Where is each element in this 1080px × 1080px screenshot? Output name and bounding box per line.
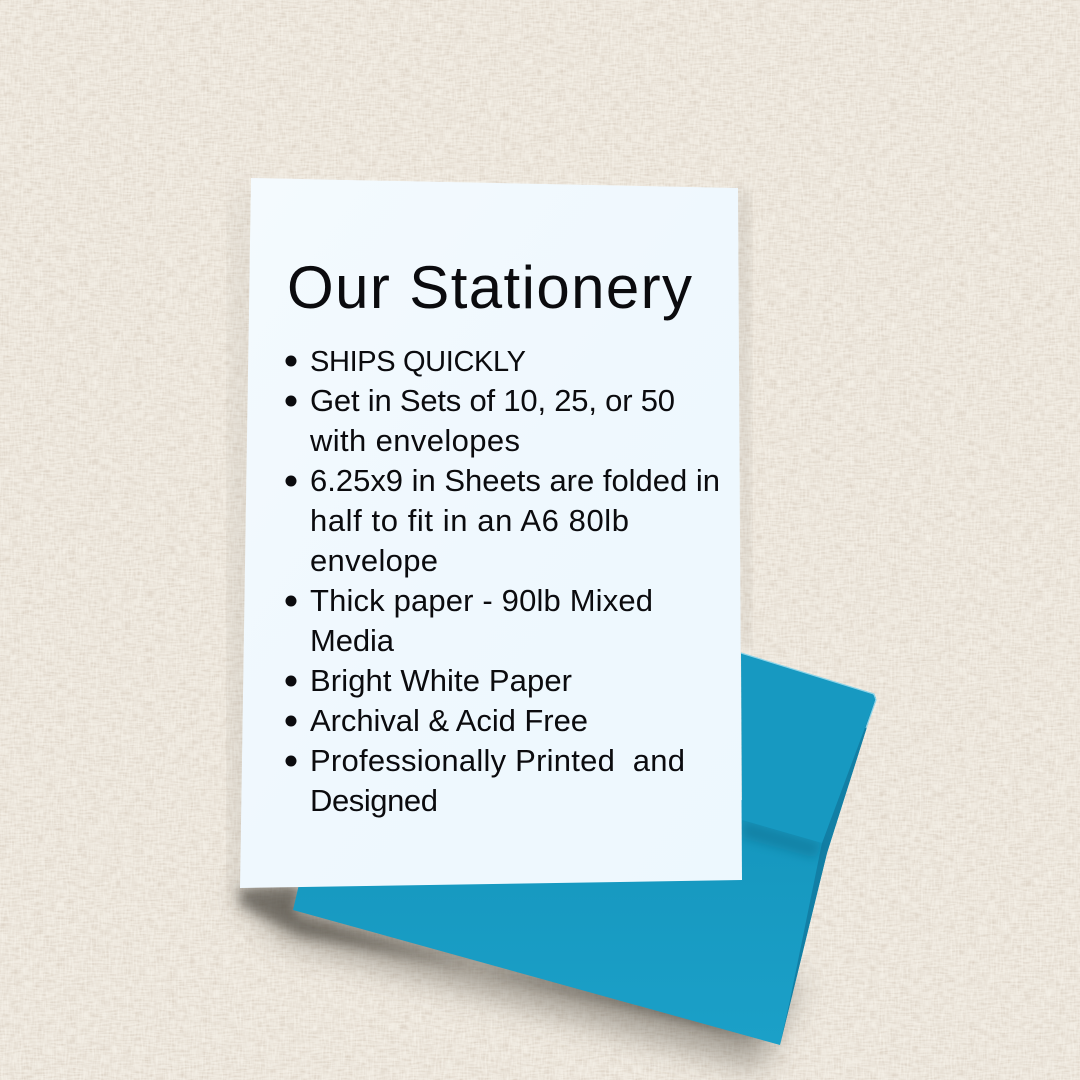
item: sets: with envelopes (309, 423, 520, 458)
title: Our Stationery (287, 254, 692, 321)
item: thick paper: Thick paper - 90lb Mixed (310, 583, 653, 618)
item: ships quickly: SHIPS QUICKLY (310, 346, 526, 378)
feature list (286, 346, 720, 818)
envelope (293, 653, 876, 1045)
item: sheet size: 6.25x9 in Sheets are folded in (310, 463, 720, 498)
item: thick paper: Media (310, 623, 395, 658)
item: sheet size (286, 463, 720, 578)
envelope body (293, 697, 876, 1045)
white stationery card (240, 178, 742, 888)
envelope flap (741, 653, 876, 843)
item: professionally printed (286, 743, 685, 818)
item: sets: Get in Sets of 10, 25, or 50 (310, 383, 675, 418)
envelope right fold (780, 697, 876, 1045)
item: thick paper (286, 583, 653, 658)
shadows beneath card and envelope (232, 180, 800, 1068)
item: archival: Archival & Acid Free (310, 703, 588, 738)
item: sets (286, 383, 675, 458)
item: sheet size: envelope (310, 543, 438, 578)
envelope flap shadow (742, 820, 822, 858)
item: bright white paper: Bright White Paper (310, 663, 572, 698)
item: sheet size: half to fit in an A6 80lb (310, 503, 629, 538)
item: professionally printed: Designed (310, 783, 438, 818)
envelope flap edge highlight (741, 653, 876, 728)
item: professionally printed: Professionally Printed and (310, 743, 685, 778)
